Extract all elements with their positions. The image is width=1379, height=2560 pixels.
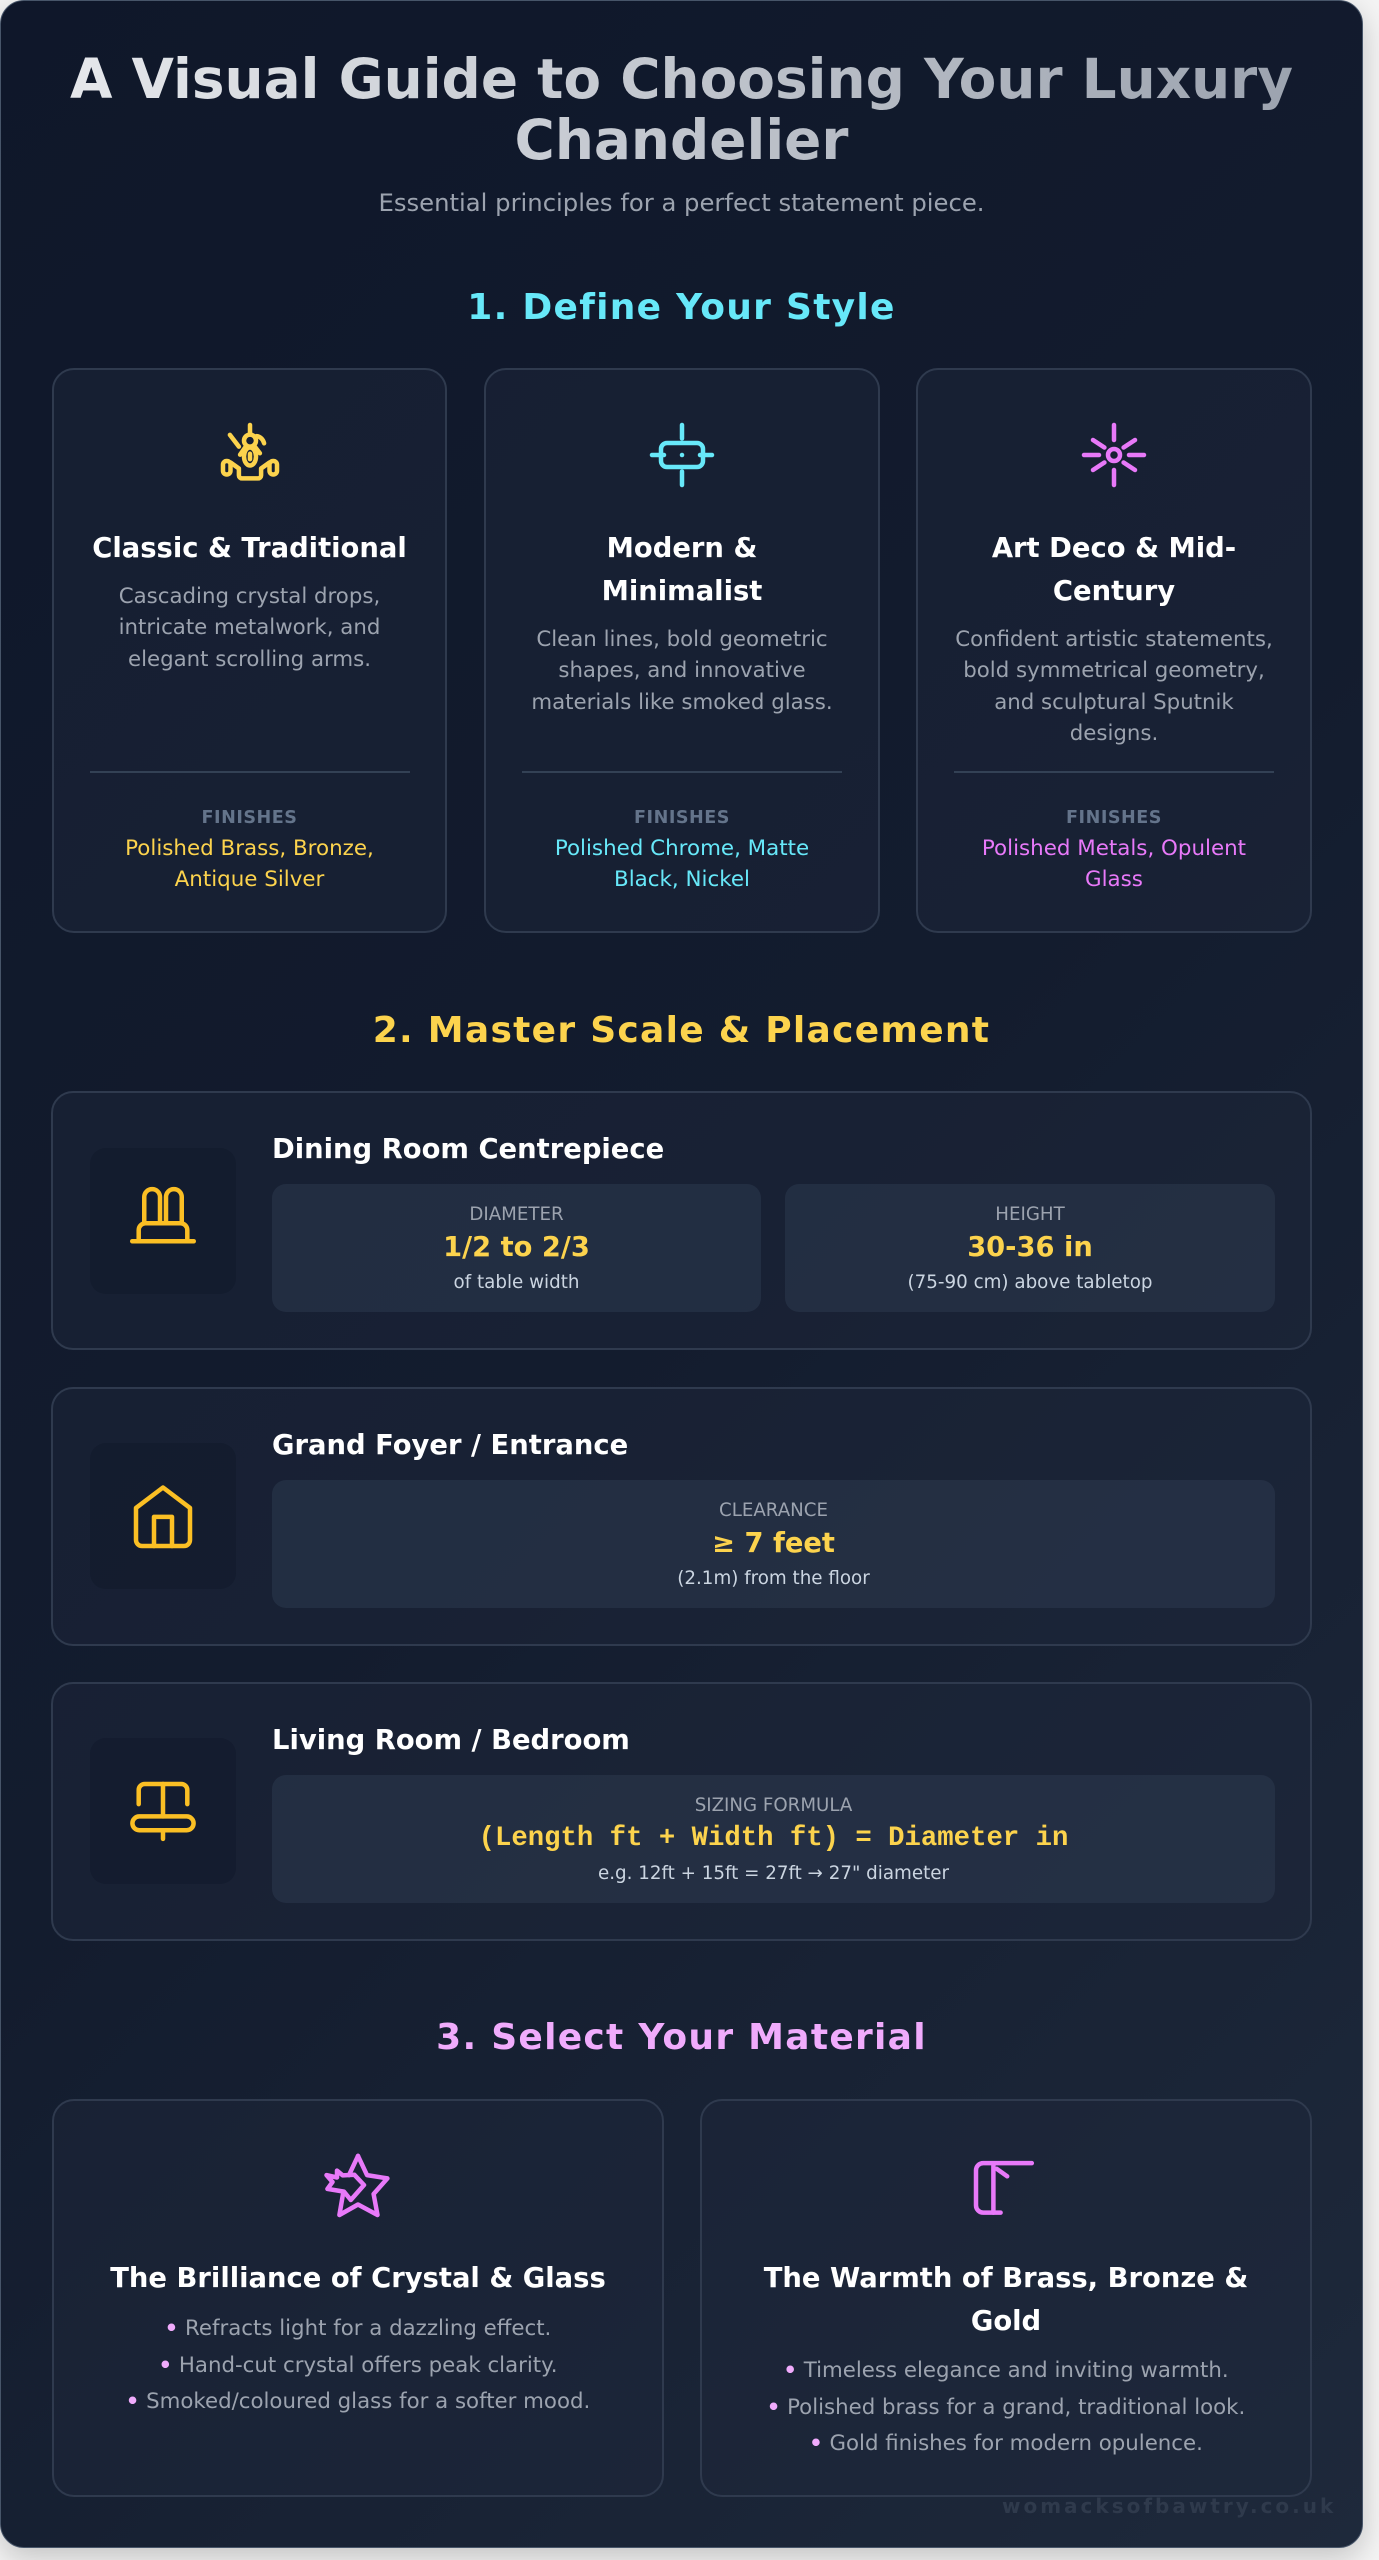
bullet list: • Smoked/coloured glass for a softer mood. bbox=[126, 2389, 590, 2414]
stat: diameter: of table width bbox=[454, 1272, 579, 1293]
stat: diameter bbox=[272, 1184, 761, 1312]
stat: height: (75-90 cm) above tabletop bbox=[908, 1272, 1152, 1293]
card title bbox=[602, 533, 762, 607]
panel: crystal and glass bbox=[52, 2099, 664, 2497]
icon: dining fixture bbox=[130, 1186, 196, 1244]
stat: sizing formula: (Length ft + Width ft) = Diameter in bbox=[479, 1823, 1068, 1854]
finishes label: FINISHES bbox=[1066, 808, 1162, 828]
card title: The Brilliance of Crystal & Glass bbox=[110, 2263, 606, 2294]
description: elegant scrolling arms. bbox=[128, 647, 371, 672]
icon box: living room bbox=[90, 1738, 236, 1884]
card title: Gold bbox=[971, 2306, 1041, 2337]
stat: sizing formula: SIZING FORMULA bbox=[695, 1795, 852, 1816]
description bbox=[955, 627, 1273, 746]
description: designs. bbox=[1070, 721, 1158, 746]
stat: sizing formula bbox=[272, 1775, 1275, 1903]
panel heading: Living Room / Bedroom bbox=[272, 1725, 630, 1756]
card title: Classic & Traditional bbox=[92, 533, 407, 564]
bullet list: • Polished brass for a grand, traditional look. bbox=[767, 2394, 1245, 2420]
card title: The Warmth of Brass, Bronze & bbox=[764, 2263, 1248, 2294]
bullet list: • Gold finishes for modern opulence. bbox=[809, 2431, 1203, 2456]
stat: clearance: CLEARANCE bbox=[719, 1500, 828, 1521]
stat: clearance: ≥ 7 feet bbox=[712, 1528, 835, 1559]
panel: grand foyer bbox=[51, 1387, 1312, 1646]
panel: classic and traditional bbox=[52, 368, 447, 933]
card title: Minimalist bbox=[602, 576, 762, 607]
icon box: dining bbox=[90, 1148, 236, 1294]
description: Clean lines, bold geometric bbox=[536, 627, 828, 652]
description: bold symmetrical geometry, bbox=[963, 658, 1265, 683]
finishes list: Polished Chrome, Matte bbox=[555, 836, 809, 861]
icon: stars bbox=[324, 2154, 390, 2218]
bullet list: • Hand-cut crystal offers peak clarity. bbox=[158, 2352, 557, 2378]
description bbox=[531, 627, 833, 715]
heading: section 2: 2. Master Scale & Placement bbox=[373, 1010, 990, 1051]
icon: house bbox=[134, 1485, 192, 1548]
finishes list: Antique Silver bbox=[175, 867, 324, 892]
heading: section 1: 1. Define Your Style bbox=[467, 287, 896, 328]
stat: sizing formula: e.g. 12ft + 15ft = 27ft → 27" diameter bbox=[598, 1863, 949, 1884]
icon: metal arm bbox=[974, 2160, 1034, 2215]
bullet list: • Refracts light for a dazzling effect. bbox=[165, 2316, 551, 2341]
stat: clearance: (2.1m) from the floor bbox=[677, 1568, 870, 1589]
heading: section 3: 3. Select Your Material bbox=[436, 2017, 927, 2058]
finishes list: Polished Metals, Opulent bbox=[982, 836, 1246, 861]
panel: living room bbox=[51, 1682, 1312, 1941]
panel heading: Dining Room Centrepiece bbox=[272, 1134, 664, 1165]
finishes label: FINISHES bbox=[202, 808, 297, 828]
stat: height: 30-36 in bbox=[967, 1232, 1093, 1263]
panel: art deco and mid-century bbox=[916, 368, 1312, 933]
panel: modern and minimalist bbox=[484, 368, 880, 933]
card title bbox=[764, 2263, 1248, 2337]
stat: height: HEIGHT bbox=[995, 1204, 1065, 1225]
title bbox=[70, 47, 1293, 172]
finishes list: Black, Nickel bbox=[614, 867, 750, 892]
icon: pendant bbox=[130, 1782, 196, 1842]
finishes list bbox=[982, 836, 1246, 892]
panel heading: Grand Foyer / Entrance bbox=[272, 1430, 628, 1461]
description: Confident artistic statements, bbox=[955, 627, 1273, 652]
watermark: womacksofbawtry.co.uk bbox=[1002, 2494, 1336, 2518]
icon: sputnik bbox=[1082, 422, 1146, 488]
description: Cascading crystal drops, bbox=[119, 584, 380, 609]
subtitle: Essential principles for a perfect statement piece. bbox=[378, 188, 984, 217]
panel: brass bronze gold bbox=[700, 2099, 1312, 2497]
icon box: foyer bbox=[90, 1443, 236, 1589]
card title: Modern & bbox=[607, 533, 757, 564]
stat: diameter: DIAMETER bbox=[469, 1204, 564, 1225]
card title: Century bbox=[1053, 576, 1175, 607]
finishes list: Polished Brass, Bronze, bbox=[125, 836, 374, 861]
icon: classic chandelier bbox=[220, 422, 280, 481]
stat: height bbox=[785, 1184, 1275, 1312]
bullet list bbox=[767, 2358, 1245, 2456]
description: intricate metalwork, and bbox=[119, 615, 380, 640]
title: A Visual Guide to Choosing Your Luxury bbox=[70, 47, 1293, 111]
finishes list: Glass bbox=[1085, 867, 1143, 892]
description: shapes, and innovative bbox=[558, 658, 806, 683]
finishes list bbox=[555, 836, 809, 892]
finishes list bbox=[125, 836, 374, 892]
icon: modern fixture bbox=[650, 422, 714, 488]
stat: clearance bbox=[272, 1480, 1275, 1608]
card title: Art Deco & Mid- bbox=[992, 533, 1236, 564]
description: materials like smoked glass. bbox=[531, 690, 833, 715]
bullet list bbox=[126, 2316, 590, 2414]
title: Chandelier bbox=[515, 108, 848, 172]
card title bbox=[992, 533, 1236, 607]
description bbox=[119, 584, 380, 672]
bullet list: • Timeless elegance and inviting warmth. bbox=[783, 2358, 1229, 2383]
description: and sculptural Sputnik bbox=[994, 690, 1234, 715]
stat: diameter: 1/2 to 2/3 bbox=[443, 1232, 590, 1263]
panel: dining room bbox=[51, 1091, 1312, 1350]
finishes label: FINISHES bbox=[634, 808, 730, 828]
